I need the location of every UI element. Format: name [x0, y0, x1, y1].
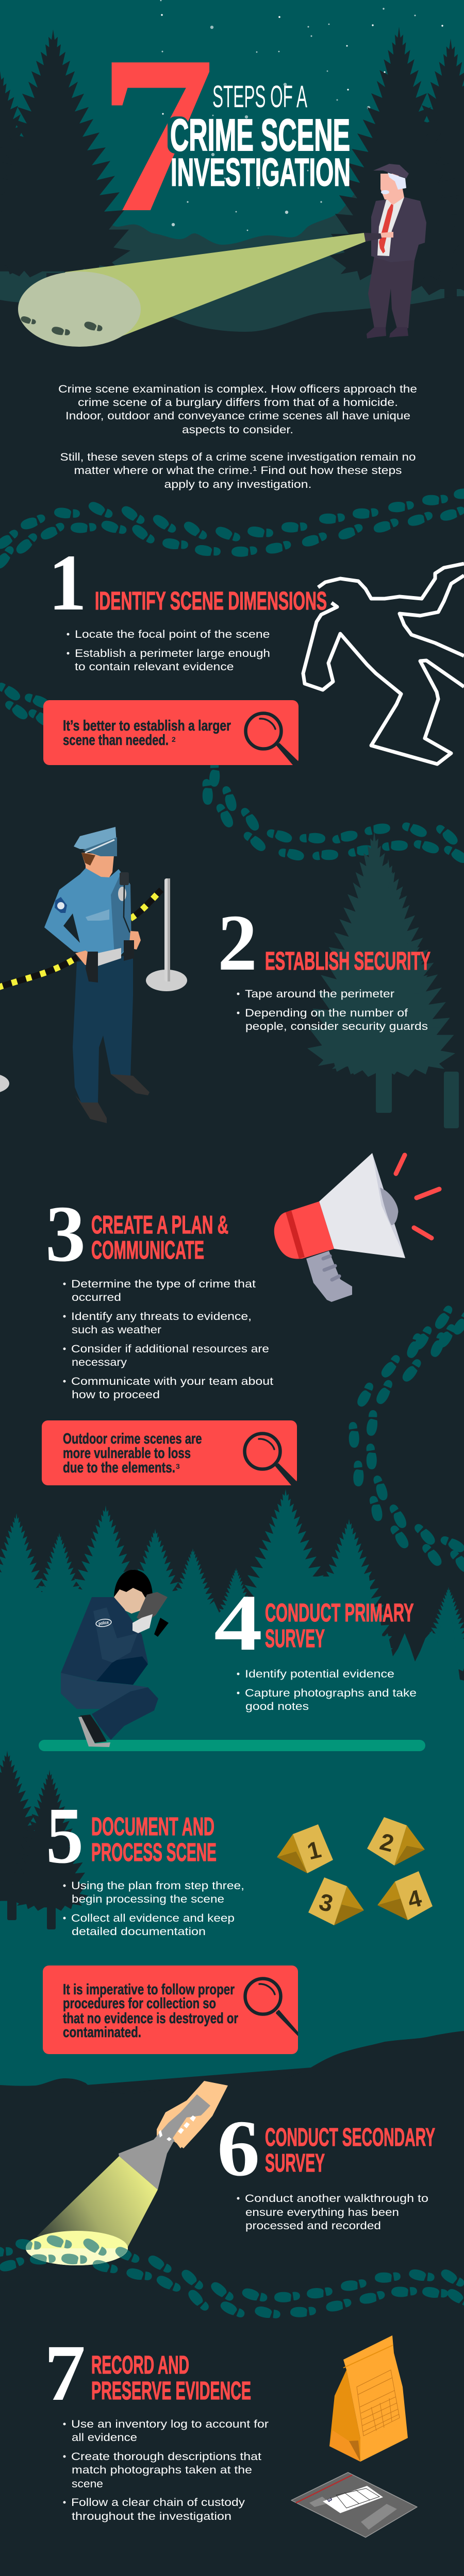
step 5	[0, 1751, 433, 1938]
foreground ground	[0, 296, 464, 361]
bullets: how to proceed	[72, 1388, 160, 1401]
crouching investigator	[61, 1570, 169, 1747]
light beam	[37, 2156, 158, 2248]
evidence marker 4	[377, 1871, 433, 1920]
callout: 3	[176, 1462, 180, 1470]
heading	[265, 2124, 435, 2177]
radio cord	[124, 885, 130, 933]
face	[114, 1588, 148, 1614]
icon: magnifying glass	[245, 713, 299, 765]
callout: scene than needed.	[63, 732, 169, 749]
pocket	[86, 909, 109, 921]
moustache	[381, 190, 389, 194]
sleeve	[93, 1607, 138, 1663]
bullets: Depending on the number of	[245, 1007, 408, 1019]
barrier tape	[0, 890, 161, 988]
bullets: Identify any threats to evidence,	[71, 1310, 252, 1323]
intro paragraphs	[58, 383, 417, 490]
radio	[120, 872, 129, 885]
jacket	[371, 197, 426, 262]
shirt shade	[111, 876, 131, 956]
step 5 callout: contaminated.	[63, 2024, 141, 2041]
footprint trail 1	[0, 486, 464, 571]
callout	[42, 1420, 297, 1485]
face	[380, 174, 404, 205]
callout: 2	[172, 735, 176, 743]
investigator figure	[364, 164, 426, 338]
heading	[91, 1813, 217, 1867]
intro paragraphs: matter where or what the crime.¹ Find out how these steps	[74, 464, 402, 477]
evidence marker 2: 2	[377, 1828, 396, 1857]
bag form lines	[357, 2370, 400, 2436]
jacket	[61, 1597, 148, 1685]
step 5 callout: that no evidence is destroyed or	[63, 2010, 238, 2027]
ground bar	[39, 1740, 425, 1751]
numeral 2: 2	[218, 898, 257, 987]
thigh	[61, 1673, 148, 1709]
evidence marker 3	[308, 1877, 364, 1925]
bullets: Conduct another walkthrough to	[245, 2192, 428, 2205]
belt	[98, 948, 121, 966]
shoulder patch	[55, 897, 67, 913]
evidence marker 4: 4	[405, 1884, 424, 1913]
title line: investigation: INVESTIGATION	[171, 150, 351, 195]
evidence marker 1	[277, 1824, 333, 1873]
hair	[114, 1570, 153, 1597]
camera lens	[154, 1618, 169, 1637]
holster	[86, 940, 134, 982]
bullets: occurred	[72, 1291, 121, 1303]
flashlight in hand	[15, 2081, 228, 2275]
bullets: Follow a clear chain of custody	[71, 2496, 245, 2509]
numeral 1: 1	[48, 538, 87, 627]
bullets	[67, 628, 270, 673]
footprint trail 2	[0, 680, 464, 865]
lower leg	[92, 1687, 158, 1740]
bullets: Establish a perimeter large enough	[75, 647, 270, 659]
step 7	[44, 2328, 417, 2537]
hair	[81, 853, 95, 866]
step 4	[39, 1570, 425, 1751]
police officer	[44, 827, 150, 1123]
flashlight	[364, 233, 382, 242]
heading: CREATE A PLAN &	[91, 1211, 228, 1239]
bullets: necessary	[72, 1356, 127, 1368]
bullets: match photographs taken at the	[72, 2464, 252, 2476]
bullets	[63, 1879, 244, 1938]
evidence marker 1: 1	[304, 1836, 324, 1865]
flashlight beam	[18, 233, 366, 347]
icon: magnifying glass	[245, 1978, 298, 2036]
bullets: Create thorough descriptions that	[71, 2450, 261, 2463]
numeral 3: 3	[45, 1189, 86, 1278]
teal forest and background for steps 4 and 5	[0, 1489, 464, 2092]
bullets: people, consider security guards	[245, 1020, 428, 1032]
boots	[367, 327, 408, 338]
footprints in the beam	[21, 316, 103, 335]
shoe sole	[78, 1717, 110, 1747]
intro paragraphs: apply to any investigation.	[164, 478, 311, 490]
light pool	[26, 2231, 128, 2265]
cap	[373, 164, 409, 178]
finger nails	[159, 2115, 196, 2141]
bullets: to contain relevant evidence	[75, 660, 234, 673]
cap	[74, 827, 117, 856]
dark hill behind step 6	[0, 2031, 464, 2576]
bullets: ensure everything has been	[245, 2206, 399, 2218]
police patch: police	[98, 1620, 109, 1626]
bag label: 3	[326, 2497, 334, 2503]
callout: due to the elements.	[63, 1460, 175, 1476]
intro paragraphs: aspects to consider.	[182, 423, 293, 436]
hands	[75, 931, 141, 965]
fingers	[173, 2115, 209, 2148]
numeral 6: 6	[217, 2104, 260, 2193]
arm gap	[63, 913, 80, 943]
hair	[388, 173, 406, 190]
trousers	[73, 955, 133, 1104]
heading	[265, 1599, 413, 1653]
callout: It’s better to establish a larger	[63, 718, 231, 734]
intro paragraphs: crime scene of a burglary differs from that of a homicide.	[78, 396, 398, 409]
bullets: Collect all evidence and keep	[71, 1912, 235, 1924]
knee	[96, 1656, 148, 1685]
intro paragraphs: Crime scene examination is complex. How officers approach the	[58, 383, 417, 395]
bullets: Locate the focal point of the scene	[75, 628, 270, 640]
bullets: Use an inventory log to account for	[71, 2418, 269, 2430]
police patch	[95, 1618, 112, 1628]
lit lower half of the pool	[26, 2248, 128, 2265]
bullets: all evidence	[72, 2431, 137, 2444]
dark trees	[0, 1751, 88, 1929]
step 5 callout	[43, 1965, 298, 2054]
step 1	[43, 538, 464, 765]
plastic evidence bag	[291, 2472, 417, 2537]
second post base	[0, 1073, 9, 1094]
intro paragraphs: Still, these seven steps of a crime scene investigation remain no	[60, 451, 416, 463]
large numeral 7: 7	[99, 10, 214, 259]
shirt	[377, 197, 404, 256]
bullets	[63, 2418, 269, 2522]
bullets: such as weather	[72, 1324, 161, 1336]
forest silhouettes	[0, 27, 464, 309]
stars	[98, 0, 443, 231]
heading	[91, 2351, 251, 2405]
neck and face	[81, 853, 114, 877]
numeral 5: 5	[46, 1791, 84, 1880]
evidence marker 2	[367, 1817, 425, 1866]
callout: Outdoor crime scenes are	[63, 1431, 202, 1447]
bullets	[237, 2192, 428, 2232]
bullets	[237, 988, 428, 1032]
bullets: Capture photographs and take	[245, 1687, 417, 1699]
title: 7 steps of a crime scene investigation	[99, 10, 351, 259]
bullets: Communicate with your team about	[71, 1375, 273, 1387]
paper evidence bag	[329, 2335, 408, 2462]
step 2	[0, 827, 459, 1128]
heading: IDENTIFY SCENE DIMENSIONS	[95, 587, 327, 615]
heading: COMMUNICATE	[91, 1236, 204, 1264]
heading: SURVEY	[265, 1625, 325, 1653]
sound rays	[396, 1155, 439, 1238]
bullets: Tape around the perimeter	[245, 988, 394, 1000]
step 3	[42, 1153, 439, 1485]
bullets: Consider if additional resources are	[71, 1343, 269, 1355]
bullets: throughout the investigation	[72, 2510, 231, 2522]
icon: magnifying glass	[244, 1433, 297, 1485]
heading: PROCESS SCENE	[91, 1839, 217, 1867]
heading: PRESERVE EVIDENCE	[91, 2377, 251, 2405]
barrier post	[146, 878, 187, 991]
badge	[118, 887, 126, 901]
shirt	[44, 868, 131, 955]
camera	[137, 1592, 168, 1623]
numeral 4: 4	[214, 1578, 262, 1667]
distant hills	[0, 188, 464, 340]
heading: SURVEY	[265, 2149, 325, 2177]
footprint trail 4	[0, 2234, 464, 2320]
bullets	[237, 1668, 417, 1713]
shoe	[80, 1715, 107, 1743]
bullets: detailed documentation	[72, 1925, 206, 1938]
tie	[379, 204, 393, 253]
callout: more vulnerable to loss	[63, 1445, 191, 1462]
legs	[368, 256, 415, 328]
callout	[43, 700, 299, 765]
icon: megaphone	[274, 1153, 439, 1302]
shoes	[75, 1074, 150, 1123]
bullets: Determine the type of crime that	[71, 1278, 256, 1290]
header scene	[0, 0, 464, 361]
heading: RECORD AND	[91, 2351, 189, 2379]
evidence marker 3: 3	[317, 1888, 336, 1917]
step 6	[15, 2081, 435, 2275]
flashlight body	[119, 2094, 210, 2190]
heading	[91, 1211, 228, 1264]
beam circle on the ground	[18, 272, 141, 347]
intro paragraphs: Indoor, outdoor and conveyance crime scenes all have unique	[65, 410, 410, 422]
bullets: begin processing the scene	[72, 1893, 224, 1905]
bullets: Identify potential evidence	[245, 1668, 394, 1680]
arm and hand	[157, 2081, 228, 2148]
bullets: good notes	[245, 1700, 309, 1713]
bag label	[323, 2486, 383, 2513]
night sky	[0, 0, 464, 335]
footprint trail 3	[347, 1303, 464, 1574]
title line: steps of a: STEPS OF A	[212, 79, 307, 114]
chalk body outline	[303, 564, 464, 764]
step 5 callout: procedures for collection so	[63, 1995, 216, 2012]
bullets: scene	[72, 2478, 103, 2490]
numeral 7: 7	[44, 2328, 86, 2417]
background trees	[307, 831, 459, 1128]
heading: DOCUMENT AND	[91, 1813, 214, 1841]
bullets: Using the plan from step three,	[71, 1879, 244, 1892]
bullets	[63, 1278, 273, 1401]
hand	[380, 232, 393, 238]
step 5 callout: It is imperative to follow proper	[63, 1981, 235, 1998]
bullets: processed and recorded	[245, 2219, 381, 2232]
glove	[132, 1614, 153, 1633]
outline notch behind title	[168, 116, 188, 154]
lit footprints	[26, 2235, 128, 2265]
